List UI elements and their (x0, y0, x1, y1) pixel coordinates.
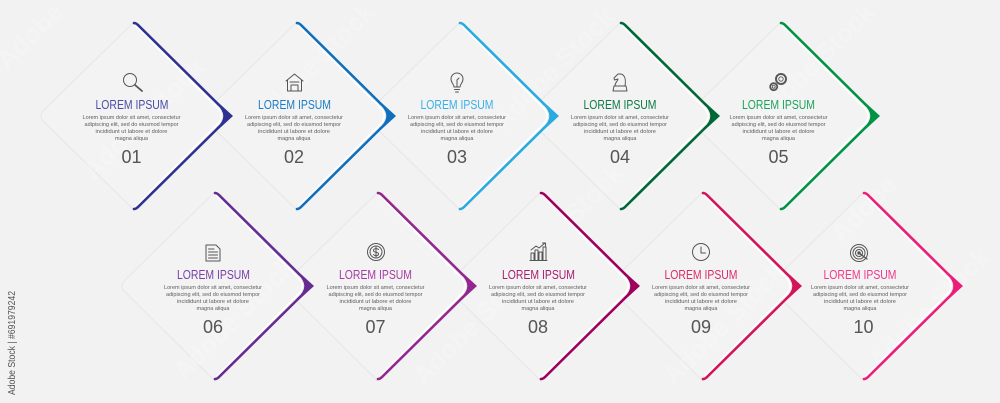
description 02: incididunt ut labore et dolore (258, 129, 330, 135)
number 07: 07 (365, 317, 386, 337)
description 05: adipiscing elit, sed do eiusmod tempor (732, 122, 826, 128)
arrow 03 (460, 23, 559, 209)
icon: magnifier (124, 74, 142, 91)
description 07: Lorem ipsum dolor sit amet, consectetur (326, 285, 425, 291)
icon: chess knight (613, 74, 627, 91)
icon: bar chart with arrow (530, 243, 547, 260)
heading 08: LOREM IPSUM (502, 268, 575, 282)
arrow 10 (864, 193, 963, 379)
heading 09: LOREM IPSUM (664, 268, 738, 282)
watermark pattern: Adobe Stock (862, 241, 996, 375)
icon: house (286, 74, 303, 91)
icon: dollar coin (368, 244, 384, 260)
heading 04: LOREM IPSUM (584, 98, 656, 112)
arrow 02 (297, 23, 396, 209)
watermark pattern: Stock (558, 158, 630, 229)
description 09: magna aliqua (684, 306, 718, 312)
card 02 (245, 23, 396, 209)
number 06: 06 (203, 317, 223, 337)
description 01 (82, 115, 181, 142)
description 06 (164, 285, 262, 312)
card 08 (489, 193, 640, 379)
number 05: 05 (768, 147, 789, 167)
description 08: incididunt ut labore et dolore (502, 299, 574, 305)
arrow 01 (134, 23, 233, 209)
description 05: Lorem ipsum dolor sit amet, consectetur (730, 115, 828, 121)
description 06: Lorem ipsum dolor sit amet, consectetur (164, 285, 262, 291)
heading 02: LOREM IPSUM (258, 98, 331, 112)
heading 03: LOREM IPSUM (420, 98, 494, 112)
description 08: Lorem ipsum dolor sit amet, consectetur (489, 285, 587, 291)
watermark pattern: Adobe Stock (167, 251, 301, 385)
description 10 (811, 285, 909, 312)
watermark pattern: Adobe Stock (77, 51, 211, 185)
description 07: adipiscing elit, sed do eiusmod tempor (328, 292, 423, 298)
description 10: Lorem ipsum dolor sit amet, consectetur (811, 285, 909, 291)
number 04: 04 (610, 147, 630, 167)
description 05: incididunt ut labore et dolore (742, 129, 814, 135)
card 01 (82, 23, 233, 209)
watermark pattern: Adobe Stock (407, 256, 541, 390)
description 07: magna aliqua (359, 306, 393, 312)
watermark pattern: Adobe Stock (657, 256, 791, 390)
description 04: adipiscing elit, sed do eiusmod tempor (573, 122, 667, 128)
description 08: adipiscing elit, sed do eiusmod tempor (491, 292, 585, 298)
number 01: 01 (121, 147, 142, 167)
description 09: incididunt ut labore et dolore (665, 299, 737, 305)
heading 06: LOREM IPSUM (177, 268, 250, 282)
description 04: incididunt ut labore et dolore (584, 129, 656, 135)
description 01: adipiscing elit, sed do eiusmod tempor (84, 122, 179, 128)
description 09 (652, 285, 750, 312)
heading 05: LOREM IPSUM (742, 98, 815, 112)
card 03 (408, 23, 559, 209)
arrow 05 (781, 23, 880, 209)
description 04: Lorem ipsum dolor sit amet, consectetur (571, 115, 669, 121)
description 04: magna aliqua (604, 136, 637, 142)
description 03: incididunt ut labore et dolore (421, 129, 493, 135)
arrow 08 (541, 193, 640, 379)
watermark pattern: Adobe Stock (747, 0, 881, 130)
description 02: Lorem ipsum dolor sit amet, consectetur (245, 115, 343, 121)
description 10: adipiscing elit, sed do eiusmod tempor (813, 292, 907, 298)
description 08 (489, 285, 587, 312)
icon: document (206, 245, 220, 261)
description 02: magna aliqua (278, 136, 311, 142)
arrow 09 (703, 193, 802, 379)
arrow 07 (378, 193, 477, 379)
arrow 04 (621, 23, 720, 209)
description 09: Lorem ipsum dolor sit amet, consectetur (652, 285, 750, 291)
description 03: Lorem ipsum dolor sit amet, consectetur (408, 115, 506, 121)
description 04 (571, 115, 669, 142)
description 01: incididunt ut labore et dolore (96, 129, 168, 135)
arrow 06 (215, 193, 314, 379)
description 02 (245, 115, 343, 142)
icon: gears (770, 74, 786, 90)
heading 07: LOREM IPSUM (339, 268, 412, 282)
description 06: adipiscing elit, sed do eiusmod tempor (166, 292, 260, 298)
description 05: magna aliqua (762, 136, 796, 142)
description 03: magna aliqua (440, 136, 474, 142)
card 05 (730, 23, 880, 209)
description 05 (730, 115, 828, 142)
watermark pattern: Adobe Stock (487, 1, 621, 135)
number 08: 08 (528, 317, 548, 337)
heading 01: LOREM IPSUM (96, 98, 168, 112)
card 10 (811, 193, 963, 379)
heading 10: LOREM IPSUM (824, 268, 896, 282)
description 06: incididunt ut labore et dolore (177, 299, 249, 305)
description 07: incididunt ut labore et dolore (340, 299, 412, 305)
watermark pattern: Adobe Stock (247, 0, 381, 130)
card 09 (652, 193, 802, 379)
card 07 (326, 193, 477, 379)
number 10: 10 (853, 317, 874, 337)
description 01: Lorem ipsum dolor sit amet, consectetur (82, 115, 181, 121)
description 07 (326, 285, 425, 312)
icon: clock (692, 244, 710, 260)
description 01: magna aliqua (115, 136, 149, 142)
stock credit: Adobe Stock | #691979242 (6, 291, 18, 395)
watermark pattern: Adobe (824, 169, 903, 248)
description 06: magna aliqua (196, 306, 230, 312)
number 09: 09 (691, 317, 711, 337)
description 10: magna aliqua (844, 306, 877, 312)
description 03 (408, 115, 506, 142)
number 02: 02 (284, 147, 304, 167)
icon: target (850, 244, 868, 262)
description 03: adipiscing elit, sed do eiusmod tempor (410, 122, 504, 128)
description 02: adipiscing elit, sed do eiusmod tempor (247, 122, 341, 128)
description 09: adipiscing elit, sed do eiusmod tempor (654, 292, 748, 298)
description 10: incididunt ut labore et dolore (824, 299, 896, 305)
icon: light bulb (451, 73, 463, 92)
card 04 (571, 23, 720, 209)
description 08: magna aliqua (522, 306, 555, 312)
number 03: 03 (447, 147, 467, 167)
card 06 (164, 193, 314, 379)
